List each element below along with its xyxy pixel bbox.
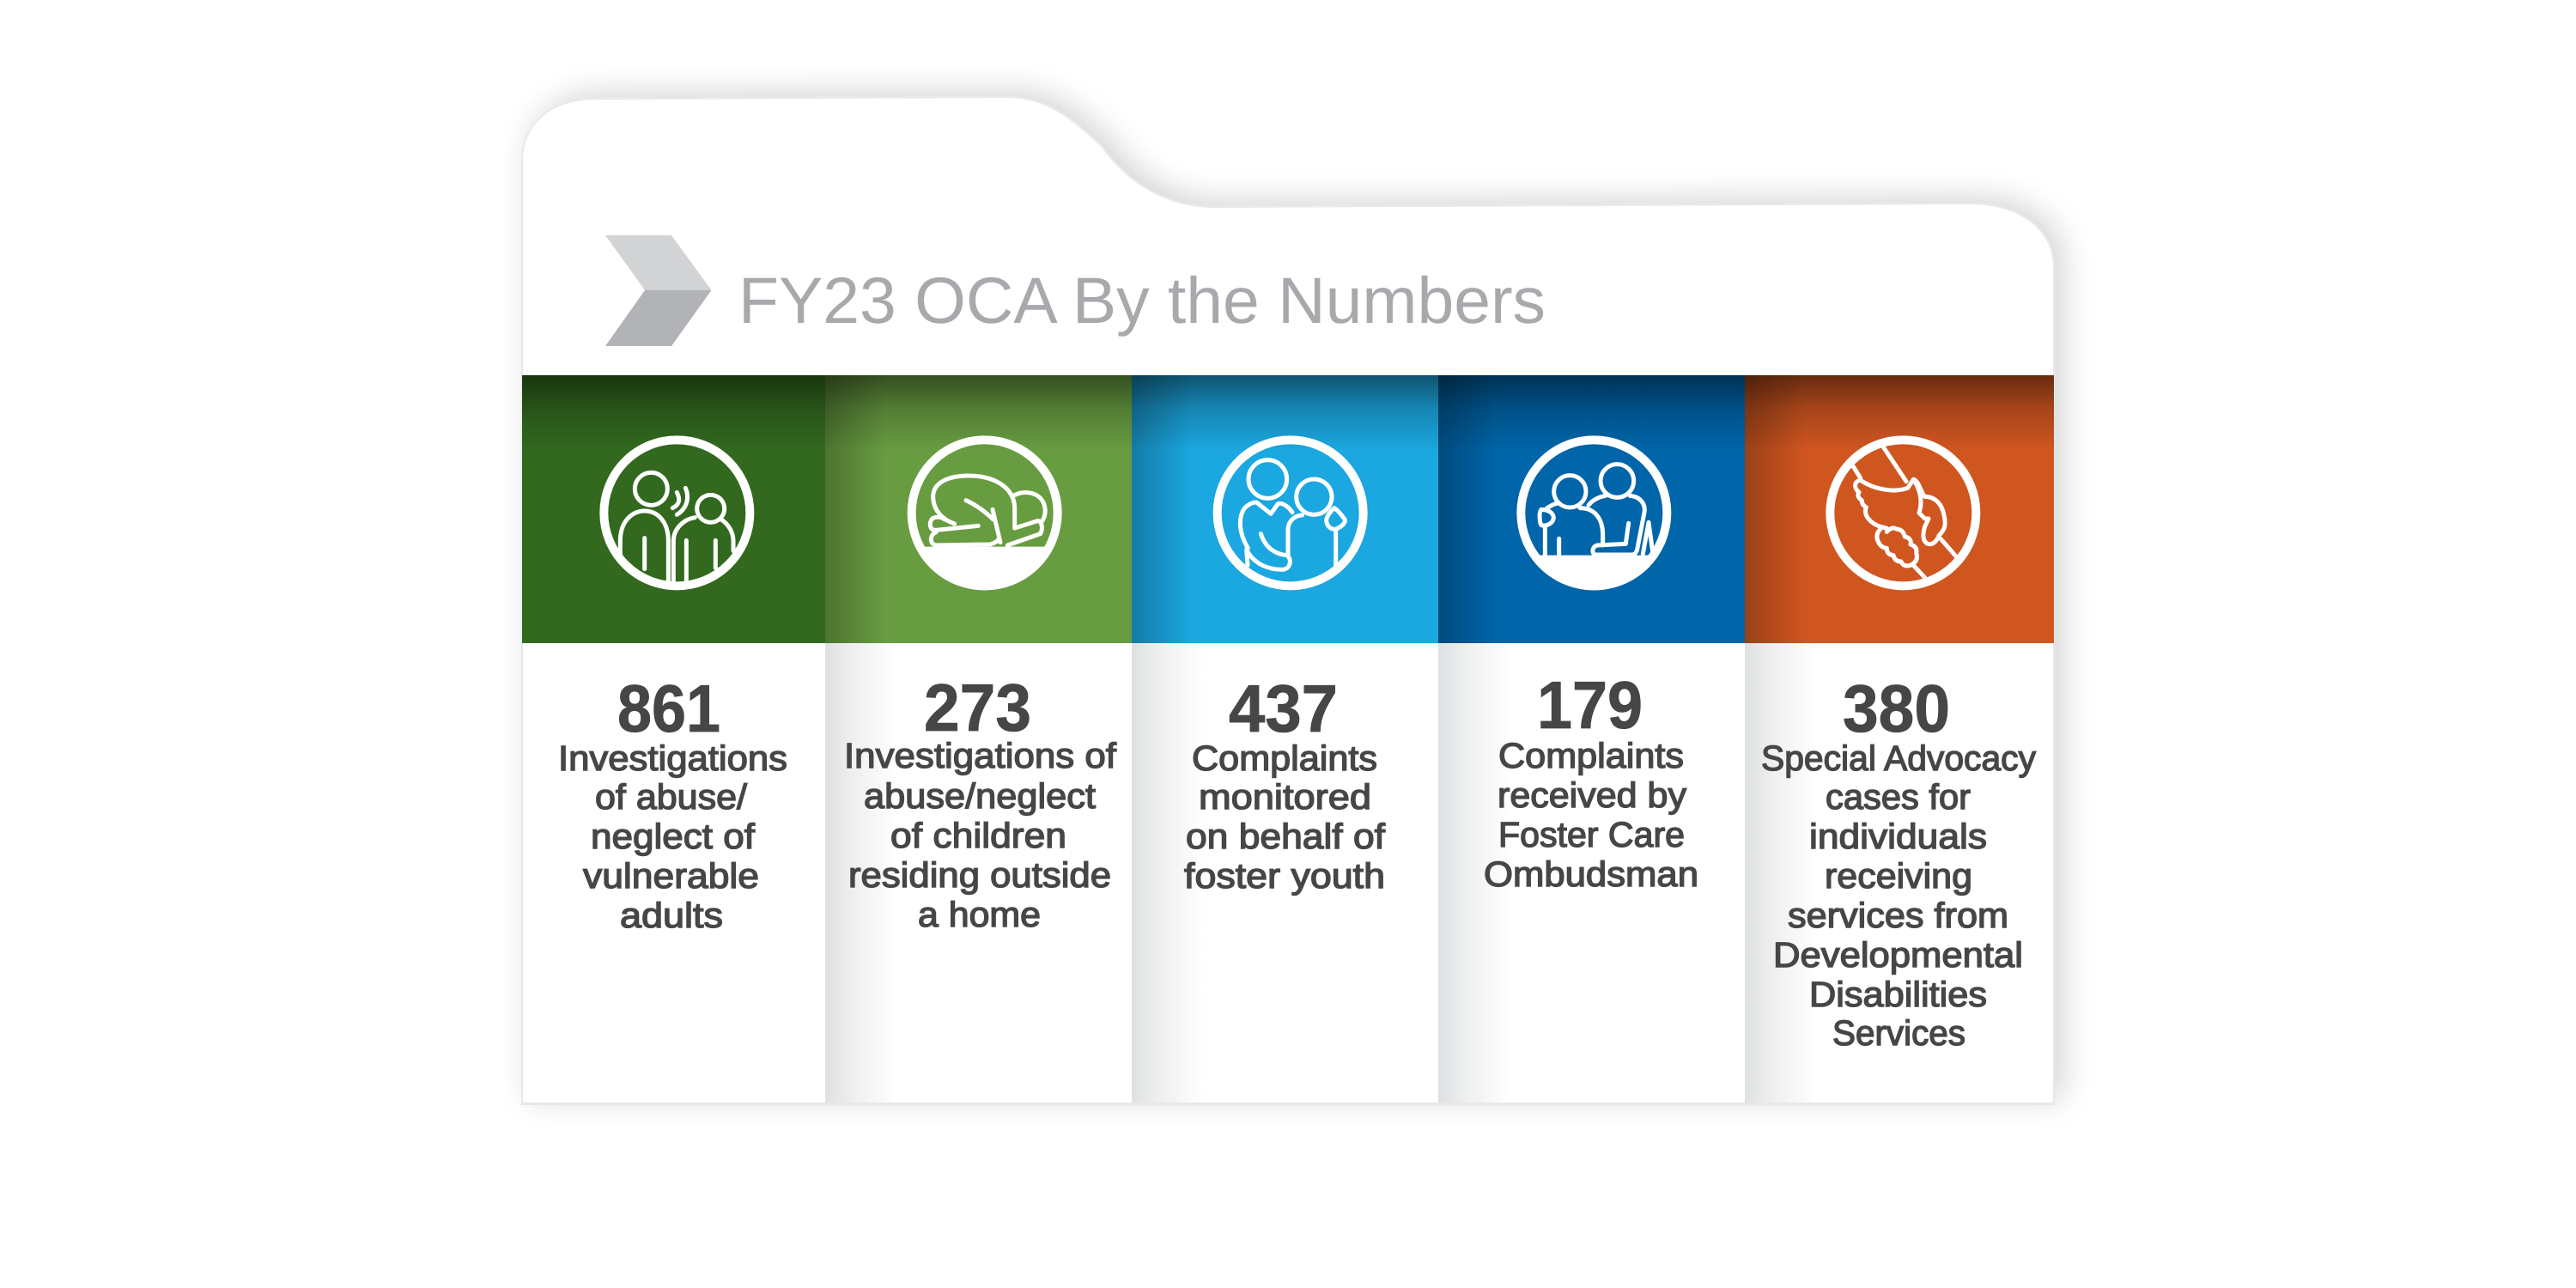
icon: two people at a table	[1521, 440, 1667, 590]
band: light green	[825, 375, 1132, 643]
stat: 380 special advocacy cases: receiving	[1825, 856, 1972, 896]
stat: 179 ombudsman complaints: Foster Care	[1498, 815, 1685, 854]
stat: 179 ombudsman complaints: 179	[1537, 667, 1643, 743]
stat: 380 special advocacy cases: services from	[1788, 896, 2008, 935]
stat: 273 children outside a home: of children	[890, 816, 1066, 855]
icon: title chevron	[605, 235, 711, 346]
stat: 179 ombudsman complaints: Ombudsman	[1484, 854, 1698, 894]
icon: clasped hands with prohibition line	[1830, 440, 1976, 586]
stat: 861 vulnerable adults: adults	[620, 896, 723, 935]
stat: 861 vulnerable adults	[558, 671, 787, 935]
stat: 861 vulnerable adults: 861	[617, 671, 720, 746]
stat: 380 special advocacy cases: cases for	[1826, 777, 1971, 817]
stat: 861 vulnerable adults: neglect of	[591, 817, 756, 856]
band: light blue	[1132, 375, 1438, 643]
folder panel	[522, 97, 2054, 1104]
stat: 437 foster youth complaints: foster youth	[1184, 856, 1385, 896]
title: FY23 OCA By the Numbers	[738, 264, 1546, 337]
stat: 380 special advocacy cases: Services	[1832, 1013, 1965, 1053]
stat: 273 children outside a home: 273	[924, 670, 1031, 745]
stat: 179 ombudsman complaints	[1484, 667, 1698, 894]
stat: 179 ombudsman complaints: Complaints	[1498, 736, 1684, 775]
stat: 179 ombudsman complaints: received by	[1498, 775, 1687, 815]
stat: 437 foster youth complaints: monitored	[1199, 777, 1371, 817]
icon: two people talking	[604, 440, 750, 586]
stat: 273 children outside a home	[844, 670, 1117, 934]
band: orange	[1745, 375, 2054, 643]
stat: 273 children outside a home: residing outside	[848, 855, 1111, 895]
stat: 380 special advocacy cases: Disabilities	[1809, 975, 1987, 1014]
icon: crouching child	[912, 440, 1058, 590]
stat: 273 children outside a home: a home	[918, 895, 1041, 934]
band: dark green	[522, 375, 825, 643]
band: dark blue	[1438, 375, 1745, 643]
stat: 380 special advocacy cases	[1761, 671, 2036, 1053]
stat: 861 vulnerable adults: vulnerable	[583, 856, 759, 896]
stat: 273 children outside a home: abuse/neglect	[864, 776, 1097, 816]
stat: 861 vulnerable adults: Investigations	[558, 738, 787, 778]
stat: 380 special advocacy cases: Special Advocacy	[1761, 738, 2036, 778]
stat: 437 foster youth complaints: on behalf of	[1186, 817, 1386, 856]
stat: 380 special advocacy cases: Developmental	[1773, 935, 2023, 975]
stat: 380 special advocacy cases: 380	[1843, 671, 1950, 746]
stat: 437 foster youth complaints: Complaints	[1192, 738, 1377, 778]
stat: 437 foster youth complaints	[1184, 671, 1386, 896]
icon: youth with adult and cane	[1218, 440, 1364, 586]
column body shading	[522, 643, 2054, 1105]
stat: 861 vulnerable adults: of abuse/	[595, 777, 748, 817]
stat: 273 children outside a home: Investigations of	[844, 736, 1117, 775]
stat: 380 special advocacy cases: individuals	[1809, 817, 1987, 856]
stat: 437 foster youth complaints: 437	[1229, 671, 1338, 746]
